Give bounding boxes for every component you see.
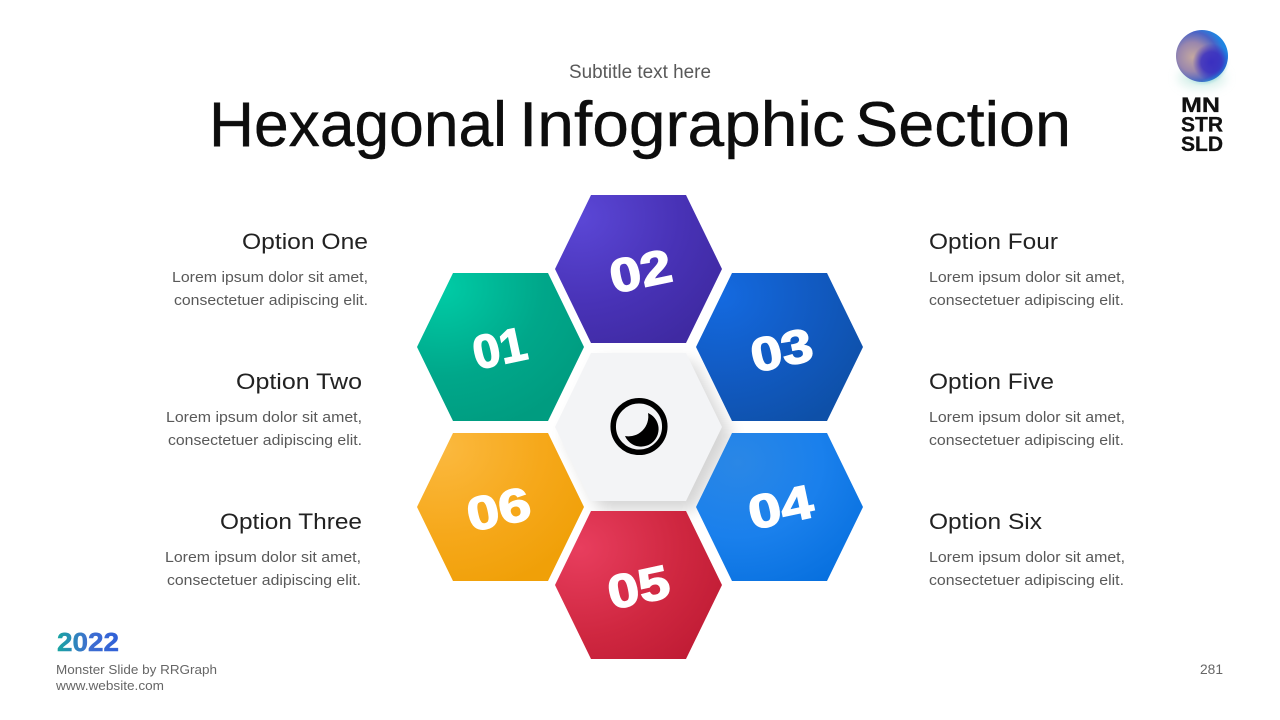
logo text: MN [1181, 94, 1220, 117]
description: consectetuer adipiscing elit. [929, 293, 1124, 309]
heading: Option Five [929, 369, 1054, 394]
logo text: SLD [1181, 133, 1223, 156]
description: Lorem ipsum dolor sit amet, [166, 410, 362, 426]
hexagon 01 [417, 273, 584, 421]
hexagon 02: 02 [605, 238, 676, 303]
footer left [55, 627, 217, 693]
title: Section [855, 90, 1071, 160]
year: 2022 [57, 627, 119, 657]
website: www.website.com [55, 678, 164, 693]
description: consectetuer adipiscing elit. [168, 433, 362, 449]
description: Lorem ipsum dolor sit amet, [929, 410, 1125, 426]
hexagon 06: 06 [462, 476, 535, 541]
description: consectetuer adipiscing elit. [167, 573, 361, 589]
credit: Monster Slide by RRGraph [56, 662, 217, 677]
page number: 281 [1200, 661, 1223, 677]
right option six [929, 509, 1125, 589]
heading: Option Three [220, 509, 362, 534]
description: Lorem ipsum dolor sit amet, [165, 550, 361, 566]
left option two [166, 369, 362, 449]
left option one [172, 229, 368, 309]
description: Lorem ipsum dolor sit amet, [929, 270, 1125, 286]
hexagon 04 [696, 433, 863, 581]
description: consectetuer adipiscing elit. [929, 433, 1124, 449]
hexagon 03: 03 [746, 317, 817, 382]
logo text: STR [1181, 114, 1223, 136]
subtitle: Subtitle text here [569, 62, 711, 83]
heading: Option Four [929, 229, 1058, 254]
hexagon cluster [417, 195, 863, 659]
hexagon 05 [555, 511, 722, 659]
right option four [929, 229, 1125, 309]
hexagon 03 [696, 273, 863, 421]
hexagon 04: 04 [743, 474, 818, 540]
logo [1176, 30, 1228, 156]
description: Lorem ipsum dolor sit amet, [929, 550, 1125, 566]
hexagon 06 [417, 433, 584, 581]
description: Lorem ipsum dolor sit amet, [172, 270, 368, 286]
title: Hexagonal [209, 90, 507, 160]
right option five [929, 369, 1125, 449]
left option three [165, 509, 362, 589]
hexagon 05: 05 [603, 554, 674, 619]
heading: Option Two [236, 369, 362, 394]
title: Infographic [519, 90, 845, 160]
hexagon 01: 01 [468, 316, 531, 379]
description: consectetuer adipiscing elit. [174, 293, 368, 309]
heading: Option One [242, 229, 368, 254]
logo orb [1176, 30, 1228, 89]
description: consectetuer adipiscing elit. [929, 573, 1124, 589]
heading: Option Six [929, 509, 1042, 534]
hexagon 02 [555, 195, 722, 343]
center hexagon with icon [555, 353, 732, 510]
